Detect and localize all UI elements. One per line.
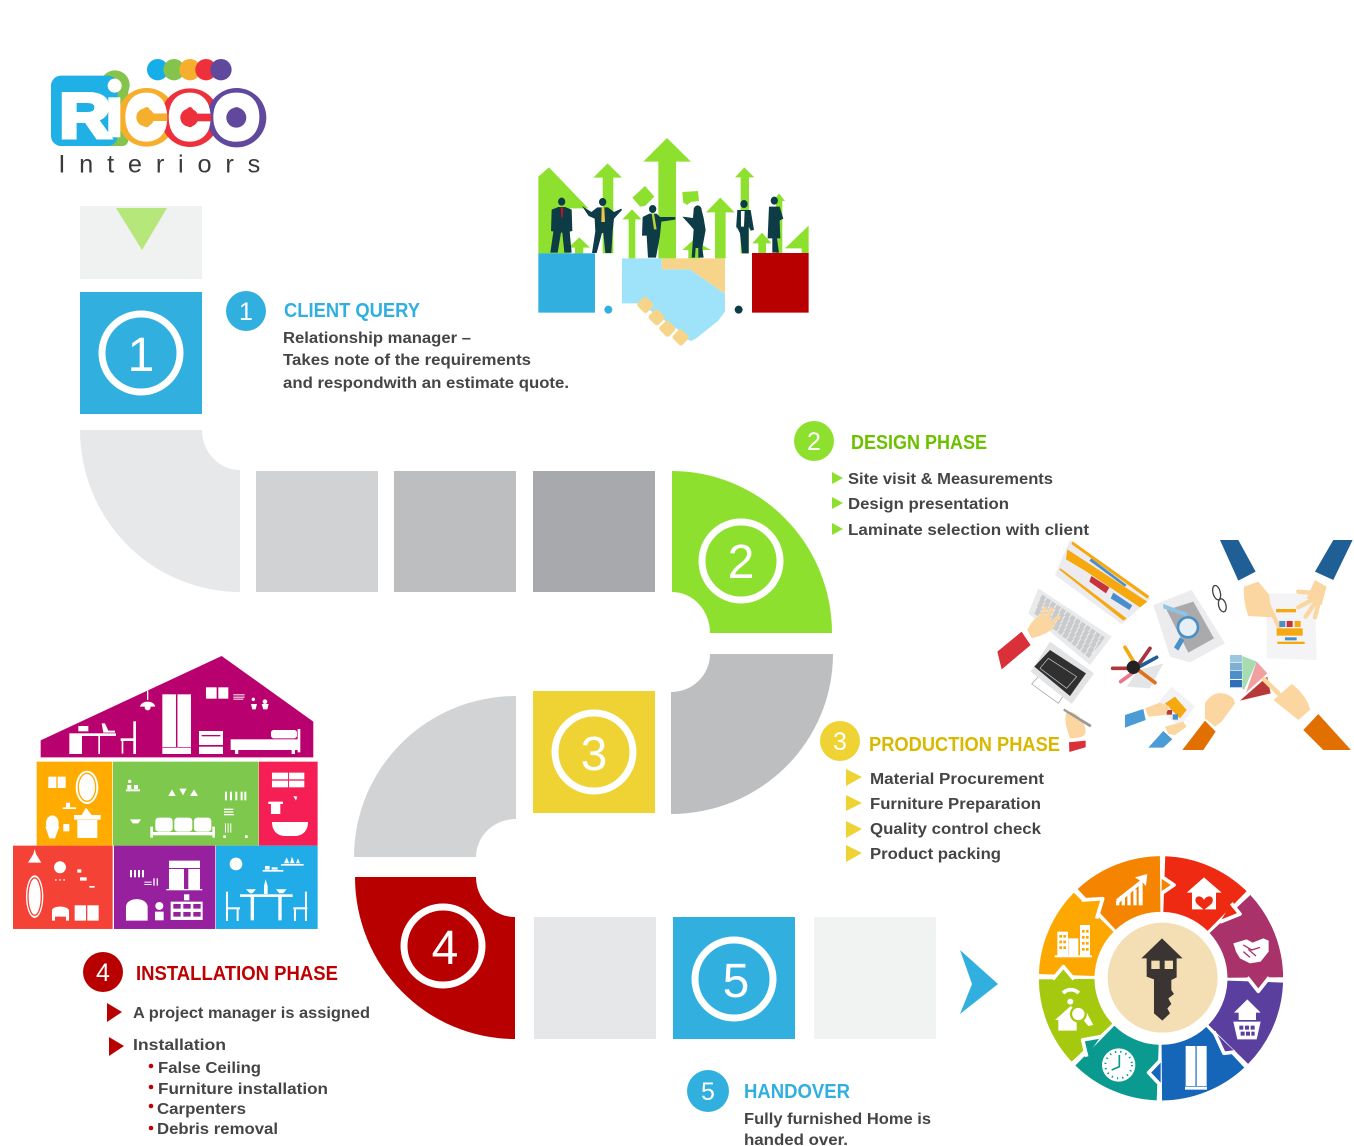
path curve top left (80, 430, 240, 592)
step tile 5: 5 (723, 955, 749, 1008)
section 4: installation phase: False Ceiling (158, 1060, 261, 1077)
logo: Ricco Interiors: c (169, 69, 209, 154)
section 3: production phase: Product packing (870, 846, 1001, 863)
step tile 4: 4 (432, 922, 458, 975)
step tile 1 (80, 292, 202, 414)
path curve left grey (354, 696, 516, 857)
section 5: handover: 5 (701, 1078, 715, 1106)
logo: Ricco Interiors: o (214, 69, 259, 154)
section 4: installation phase (83, 952, 370, 1138)
wheel icon details (1059, 896, 1260, 1086)
section 2: design phase: Laminate selection with client (848, 522, 1090, 539)
illustration: furnished house cross-section (13, 656, 318, 929)
section 4: installation phase: INSTALLATION PHASE (136, 963, 338, 985)
path tile grey 3 (533, 471, 655, 592)
section 3: production phase: Furniture Preparation (870, 796, 1041, 813)
step tile 3: 3 (581, 728, 607, 781)
section 2: design phase: Site visit & Measurements (848, 471, 1053, 488)
section 3: production phase: Material Procurement (870, 771, 1045, 788)
path tile grey 2 (394, 471, 516, 592)
arrow to final wheel (960, 950, 998, 1014)
step tile 2 (672, 471, 832, 633)
section 2: design phase: Design presentation (848, 496, 1009, 513)
logo: Ricco Interiors: Interiors (58, 150, 260, 178)
path tile lightest (814, 917, 936, 1039)
section 3: production phase: 3 (833, 728, 847, 756)
logo: Ricco Interiors: R (59, 81, 111, 151)
section 1: client query: CLIENT QUERY (284, 300, 421, 322)
section 1: client query: 1 (239, 298, 253, 326)
logo: Ricco Interiors: c (126, 69, 165, 154)
step tile 1: 1 (128, 329, 154, 382)
section 1: client query: and respondwith an estimate quote. (283, 375, 569, 392)
section 4: installation phase: Installation (133, 1037, 226, 1054)
section 3: production phase: Quality control check (870, 821, 1041, 838)
path curve right grey (671, 654, 833, 814)
section 4: installation phase: Carpenters (157, 1101, 246, 1118)
section 5: handover (687, 1070, 931, 1146)
step tile 5 (673, 917, 795, 1039)
icon wheel with key (1028, 845, 1294, 1112)
section 1: client query (226, 291, 569, 392)
section 4: installation phase: 4 (96, 959, 110, 987)
section 3: production phase: PRODUCTION PHASE (869, 734, 1060, 756)
section 4: installation phase: A project manager is assigned (133, 1005, 370, 1022)
section 3: production phase (820, 721, 1060, 863)
section 1: client query: Takes note of the requirements (283, 352, 531, 369)
section 5: handover: Fully furnished Home is (744, 1111, 931, 1128)
illustration: design team desk (997, 540, 1353, 752)
path tile grey 1 (256, 471, 378, 592)
section 5: handover: HANDOVER (744, 1081, 851, 1103)
start box with green arrow (80, 206, 202, 279)
section 2: design phase (794, 421, 1090, 539)
section 4: installation phase: Debris removal (157, 1121, 278, 1138)
section 2: design phase: DESIGN PHASE (851, 432, 987, 454)
step tile 3 (533, 691, 655, 813)
step tile 4 (355, 877, 515, 1039)
logo: Ricco Interiors (51, 59, 266, 178)
illustration: handshake with business people (538, 138, 809, 347)
path tile light (534, 917, 656, 1039)
section 2: design phase: 2 (807, 428, 821, 456)
step tile 2: 2 (728, 536, 754, 589)
section 4: installation phase: Furniture installation (158, 1081, 328, 1098)
section 1: client query: Relationship manager – (283, 330, 471, 347)
